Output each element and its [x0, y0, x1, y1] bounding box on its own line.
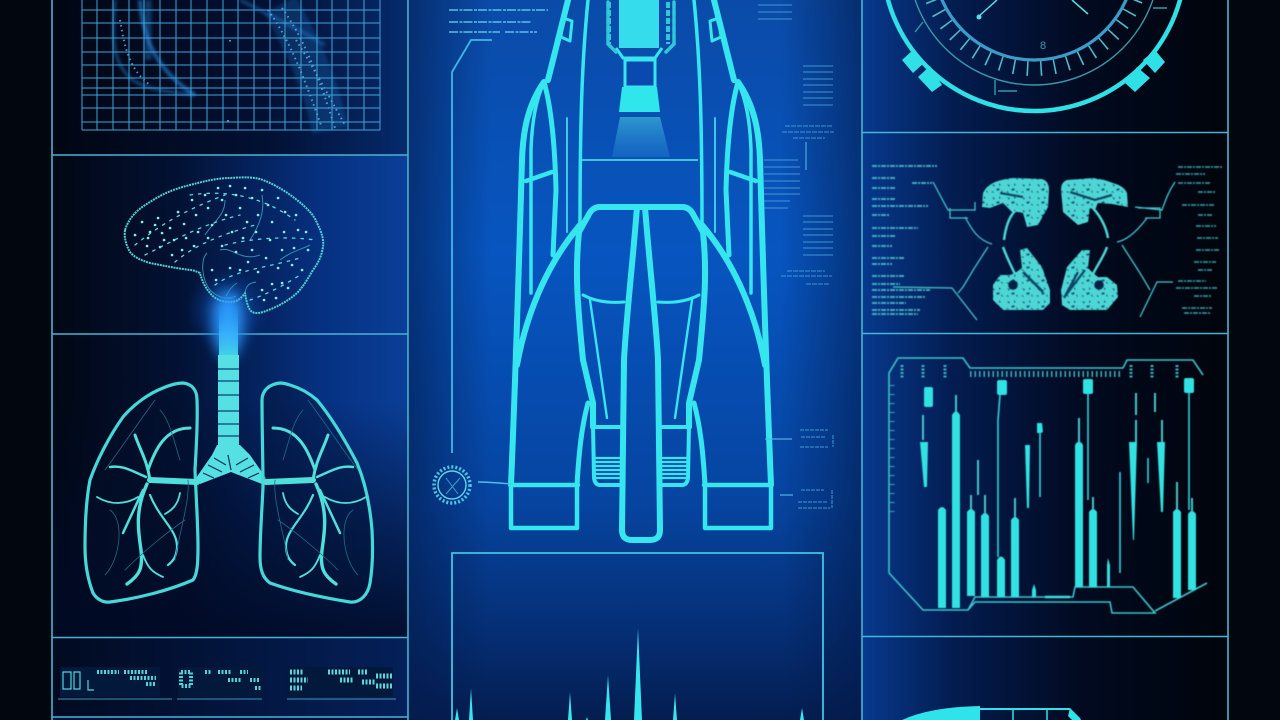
panel: lobed organ diagram	[872, 166, 1222, 320]
icon: virus ring	[434, 467, 470, 503]
scan overlay blotches	[114, 0, 330, 130]
tabs left	[902, 50, 942, 92]
chart frame	[452, 553, 823, 720]
panel: left column backgrounds	[52, 0, 408, 720]
callout: virus leader	[478, 482, 511, 484]
middle ring	[908, 0, 1160, 85]
right bronchial tree	[266, 400, 366, 584]
strip underline	[58, 698, 396, 700]
brain neuron dots	[135, 186, 308, 300]
lobe bottom left	[993, 247, 1050, 310]
data block three	[287, 667, 393, 697]
tick ring	[925, 0, 1143, 68]
left ruler	[890, 385, 894, 520]
grid lines	[82, 0, 380, 130]
thin stems	[998, 393, 1189, 573]
brain dotted synapse traces	[135, 193, 315, 300]
left lung outline	[85, 383, 198, 602]
engine beam	[612, 117, 670, 157]
data block two	[178, 667, 262, 697]
panel: gauge dial	[882, 0, 1186, 111]
tabs right	[1125, 50, 1165, 92]
lobe top left	[982, 178, 1049, 240]
right microtext	[1176, 167, 1222, 313]
chart: bottom centre spectrum	[452, 553, 823, 720]
deck line	[582, 159, 698, 161]
trachea glow	[214, 291, 242, 359]
right half outline	[641, 0, 771, 540]
bar stems	[923, 393, 1192, 517]
brain outline	[125, 177, 323, 313]
glow under brain	[186, 268, 270, 352]
trachea	[196, 304, 266, 484]
header ticks	[902, 365, 1177, 378]
leader lines	[893, 182, 1175, 320]
lobe bottom right	[1061, 247, 1118, 310]
dial mark: 8	[1040, 40, 1046, 52]
data block one	[60, 667, 160, 697]
solid bars	[938, 412, 1196, 608]
panel: bar chart	[889, 358, 1207, 613]
chart baseline fill	[1045, 596, 1070, 598]
scan speckle	[120, 8, 345, 128]
panel: centre column background	[409, 0, 862, 720]
brain folds	[203, 195, 310, 298]
panel: data strip	[58, 667, 396, 699]
dial hands	[978, 0, 1088, 17]
left bronchial tree	[97, 400, 197, 584]
engine core	[609, 0, 668, 112]
left half outline	[511, 0, 641, 540]
hand dot left	[976, 14, 982, 20]
callout: lower right notes	[765, 430, 833, 508]
right lung outline	[260, 383, 373, 602]
text block: right side ruled notes	[758, 5, 834, 284]
outer ring	[882, 0, 1186, 111]
panel: lungs	[85, 291, 373, 602]
inner ring	[934, 0, 1134, 60]
spectrum spikes	[455, 628, 804, 720]
panel: central rocket blueprint	[511, 0, 771, 540]
lobe top right	[1061, 178, 1128, 238]
chart outline	[889, 358, 1207, 613]
panel: brain	[125, 177, 323, 352]
capsules	[924, 378, 1194, 433]
floating bars	[920, 442, 1165, 540]
panel: grid scan with blue overlay	[82, 0, 380, 130]
left microtext	[872, 166, 937, 314]
icon: bottom capsule	[902, 706, 1081, 720]
callout: left leader line	[452, 40, 492, 453]
marker ticks	[915, 8, 1167, 95]
text block: top left microtext	[449, 10, 548, 32]
panel: right column backgrounds	[862, 0, 1228, 720]
